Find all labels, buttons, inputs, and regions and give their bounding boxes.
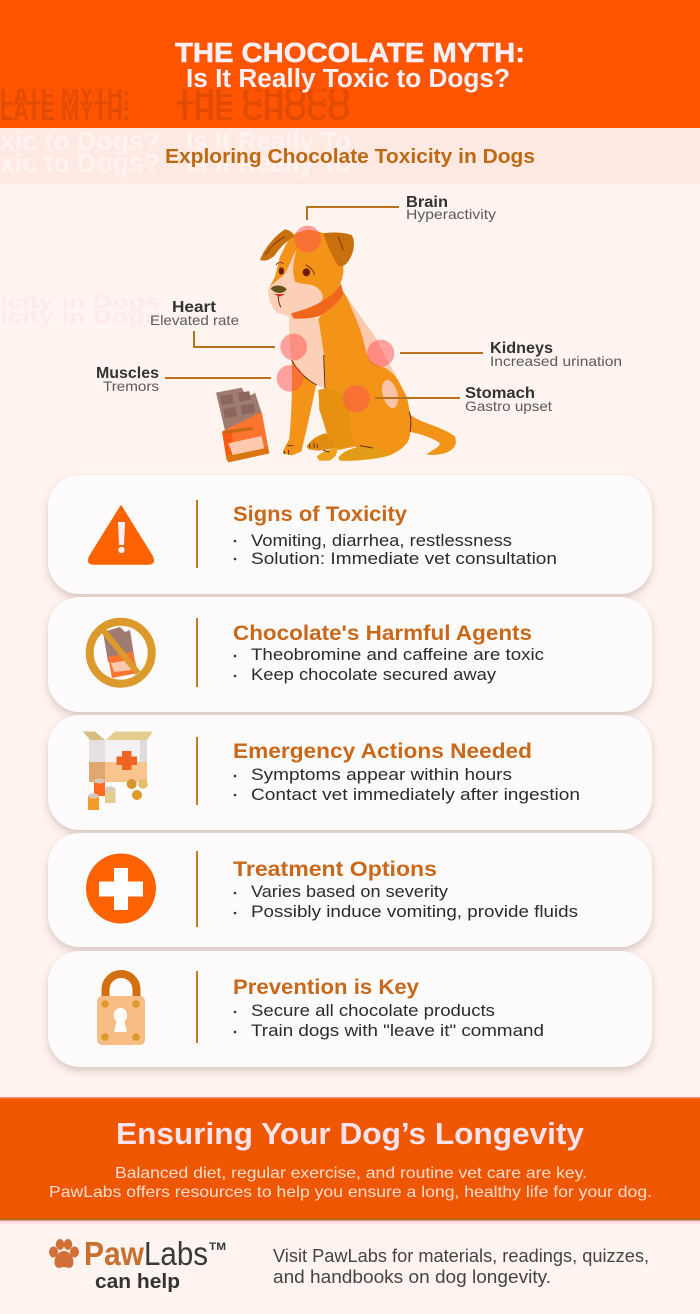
callout: kidneys: Increased urination [490, 353, 622, 369]
banner text: PawLabs offers resources to help you ensure a long, healthy life for your dog. [49, 1184, 652, 1201]
cream chest [289, 315, 326, 388]
callout: muscles: Tremors [103, 378, 159, 394]
bullet list [234, 531, 557, 568]
footer text [273, 1246, 649, 1287]
callout: brain: Brain [406, 194, 448, 211]
callout: stomach: Gastro upset [465, 398, 552, 414]
callout: kidneys: Kidneys [490, 340, 553, 357]
face patch [268, 250, 323, 316]
faint ghost text: icity in Dogs [0, 292, 160, 312]
icon: chocolate bar [216, 388, 269, 462]
bullet list: Theobromine and caffeine are toxic [251, 645, 545, 664]
haunch [349, 394, 411, 457]
logo: PawLabs: Labs [144, 1235, 208, 1272]
bullet list [234, 645, 545, 684]
collar [291, 283, 343, 319]
hind foot [338, 446, 392, 461]
logo: PawLabs: can help [95, 1271, 180, 1293]
panel: prevention [48, 951, 652, 1067]
hotspot: heart [280, 334, 307, 360]
icon: no chocolate [90, 622, 152, 684]
bullet list [234, 1001, 544, 1040]
hotspot: kidneys [367, 340, 394, 367]
heading: Prevention is Key [233, 976, 419, 999]
bullet list: Symptoms appear within hours [251, 765, 512, 784]
back patch [347, 297, 397, 378]
hotspot: brain [294, 226, 321, 252]
footer banner [0, 1097, 700, 1224]
faint ghost text [0, 292, 160, 327]
bullet list: Contact vet immediately after ingestion [251, 785, 580, 804]
logo: PawLabs: TM [209, 1241, 226, 1253]
footer text: and handbooks on dog longevity. [273, 1267, 551, 1287]
front right leg shade [319, 388, 357, 449]
bullet list: Varies based on severity [251, 882, 449, 901]
bullet list: Train dogs with "leave it" command [251, 1021, 544, 1040]
banner heading: Ensuring Your Dog’s Longevity [116, 1117, 584, 1151]
ears [260, 229, 294, 261]
illustration: dog with chocolate [216, 226, 456, 462]
head [268, 229, 343, 315]
title: THE CHOCOLATE MYTH: [175, 37, 525, 68]
callout: brain: Hyperactivity [406, 206, 496, 222]
callout: muscles [96, 365, 271, 394]
title: Is It Really Toxic to Dogs? [186, 65, 510, 93]
icon: paw [49, 1239, 79, 1268]
banner text: Balanced diet, regular exercise, and routine vet care are key. [115, 1165, 587, 1182]
eyes [303, 268, 310, 276]
tail [409, 414, 456, 455]
icon: medical cross [86, 854, 156, 924]
callout: heart: Elevated rate [150, 312, 239, 328]
bullet list: Possibly induce vomiting, provide fluids [251, 902, 578, 921]
callout: kidneys [400, 340, 622, 369]
subtitle band: xic to Dogs? [0, 150, 160, 178]
bullet list [234, 882, 578, 921]
title [175, 37, 525, 93]
header banner: THE CHOCO [176, 81, 350, 111]
heading: Chocolate's Harmful Agents [233, 622, 532, 645]
subtitle band: Is It Really To [186, 128, 351, 156]
header banner: THE CHOCO [176, 96, 350, 126]
subtitle band [0, 128, 700, 184]
hind paw [307, 433, 353, 451]
subtitle band: Is It Really To [186, 150, 351, 178]
front paw [317, 447, 338, 461]
body [318, 292, 411, 457]
panel: treatment options [48, 833, 652, 947]
heading: Emergency Actions Needed [233, 740, 532, 763]
bullet list [234, 765, 580, 804]
bullet list: Vomiting, diarrhea, restlessness [251, 531, 512, 550]
panel: emergency actions [48, 715, 652, 830]
header banner: LATE MYTH: [0, 81, 130, 111]
bullet list: Solution: Immediate vet consultation [251, 549, 557, 568]
callout: heart: Heart [172, 299, 216, 316]
front left leg [283, 360, 316, 455]
banner text [49, 1165, 652, 1201]
footer text: Visit PawLabs for materials, readings, quizzes, [273, 1246, 649, 1266]
header banner: LATE MYTH: [0, 96, 130, 126]
callout: brain [307, 194, 496, 222]
bullet list: Secure all chocolate products [251, 1001, 495, 1020]
faint ghost text: icity in Dogs [0, 307, 160, 327]
icon: warning triangle [89, 506, 153, 564]
subtitle band: xic to Dogs? [0, 128, 160, 156]
icon: first aid box [83, 732, 153, 810]
logo: PawLabs [49, 1235, 226, 1293]
callout: stomach [375, 385, 552, 414]
heading: Signs of Toxicity [233, 503, 407, 526]
callout: stomach: Stomach [465, 385, 535, 402]
icon: padlock [97, 974, 145, 1045]
panel: harmful agents [48, 597, 652, 712]
nose [271, 286, 287, 293]
header banner [0, 0, 700, 128]
bullet list: Keep chocolate secured away [251, 665, 497, 684]
logo: PawLabs: Paw [84, 1235, 144, 1272]
hotspots [277, 226, 394, 412]
hotspot: muscles [277, 365, 303, 392]
panel: signs of toxicity [48, 475, 652, 594]
callout: heart [150, 299, 275, 347]
subtitle: Exploring Chocolate Toxicity in Dogs [165, 146, 535, 168]
hotspot: stomach [343, 385, 370, 412]
heading: Treatment Options [233, 858, 437, 881]
body lines [284, 355, 411, 455]
callout: muscles: Muscles [96, 365, 159, 382]
